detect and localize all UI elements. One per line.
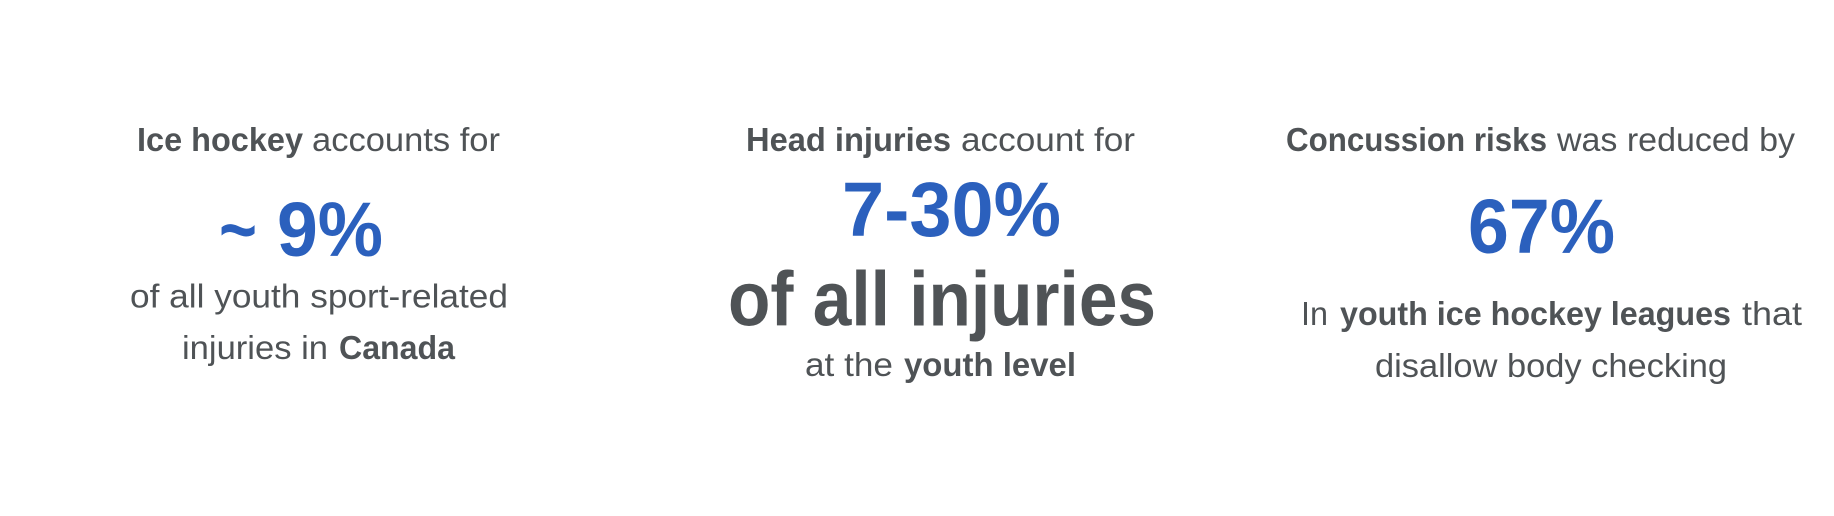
text block: in youth ice hockey leagues that disallow body checking: that (1742, 295, 1802, 332)
statistic: about 9 percent: ~ (219, 187, 257, 273)
statistic: about 9 percent: 9% (277, 187, 383, 273)
statistic: 7-30 percent: 7-30% (842, 167, 1061, 253)
text block: of all youth sport-related injuries in Canada: of all youth sport-related (130, 278, 508, 314)
panel: head injuries share (728, 121, 1156, 383)
heading: head injuries account for: account for (961, 121, 1135, 158)
text block: at the youth level: youth level (904, 346, 1076, 383)
heading: ice hockey accounts for (137, 121, 500, 158)
large text: of all injuries: of all injuries (728, 256, 1156, 342)
text block: of all youth sport-related injuries in Canada (130, 278, 508, 366)
heading: concussion risks was reduced by: Concussion risks (1286, 121, 1547, 158)
text block: of all youth sport-related injuries in Canada: injuries in (182, 329, 328, 366)
heading: ice hockey accounts for: accounts for (312, 121, 500, 158)
heading: ice hockey accounts for: Ice hockey (137, 121, 304, 158)
heading: concussion risks was reduced by (1286, 121, 1796, 158)
text block: at the youth level (805, 346, 1076, 383)
statistic: 67 percent: 67% (1468, 184, 1615, 270)
text block: in youth ice hockey leagues that disallow body checking (1301, 295, 1802, 384)
heading: head injuries account for: Head injuries (746, 121, 951, 158)
text block: in youth ice hockey leagues that disallow body checking: youth ice hockey leagues (1340, 295, 1731, 332)
text block: in youth ice hockey leagues that disallow body checking: In (1301, 295, 1328, 332)
text block: of all youth sport-related injuries in Canada: Canada (339, 329, 456, 366)
heading: head injuries account for (746, 121, 1135, 158)
panel: concussion risk reduction (1286, 121, 1802, 384)
statistic: about 9 percent (219, 187, 383, 273)
text block: at the youth level: at the (805, 346, 893, 383)
panel: ice hockey share (130, 121, 508, 366)
text block: in youth ice hockey leagues that disallow body checking: disallow body checking (1375, 347, 1727, 384)
heading: concussion risks was reduced by: was reduced by (1556, 121, 1796, 158)
